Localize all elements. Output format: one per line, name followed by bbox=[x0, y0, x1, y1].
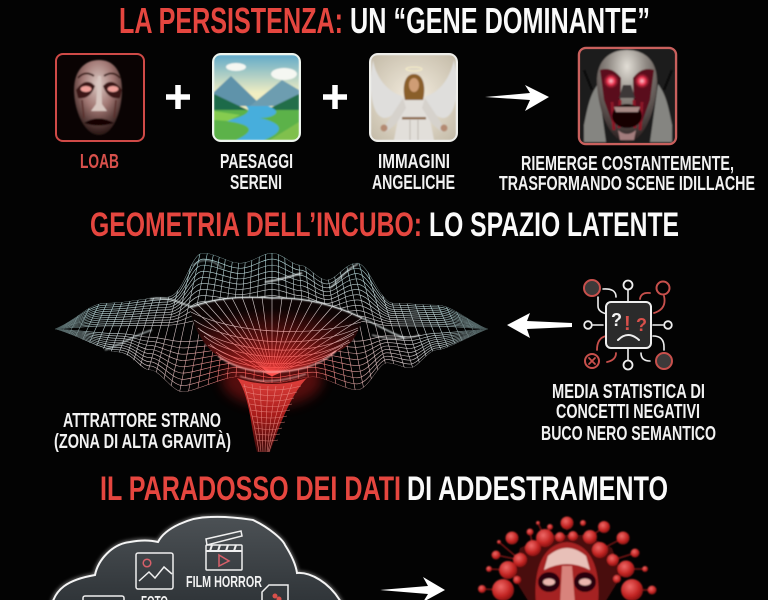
title: geometria dell'incubo: GEOMETRIA DELL’INCUBO: bbox=[90, 206, 422, 244]
title: geometria dell'incubo: LO SPAZIO LATENTE bbox=[429, 206, 679, 244]
panel: serene landscape bbox=[213, 54, 300, 141]
chart: latent space mesh bbox=[55, 253, 488, 452]
panel: loab portrait bbox=[56, 54, 144, 141]
label: riemerge costantemente bbox=[499, 153, 755, 195]
arrow: to red head bbox=[380, 577, 445, 600]
label: immagini angeliche: ANGELICHE bbox=[372, 172, 455, 194]
icon: screen bbox=[83, 596, 124, 600]
illustration: data-bloated red head bbox=[478, 516, 656, 600]
icon: photo bbox=[136, 553, 173, 589]
label: media statistica bbox=[541, 381, 716, 445]
label: paesaggi sereni bbox=[220, 151, 293, 194]
label: attrattore strano bbox=[54, 410, 231, 453]
funnel bbox=[237, 378, 307, 452]
label: film horror: FILM HORROR bbox=[186, 574, 262, 591]
icon: plus bbox=[323, 85, 347, 109]
title: la persistenza: LA PERSISTENZA: bbox=[119, 0, 343, 41]
icon: plus bbox=[166, 85, 190, 109]
label: immagini angeliche: IMMAGINI bbox=[378, 151, 450, 173]
label: attrattore strano: ATTRATTORE STRANO bbox=[63, 410, 221, 432]
title: il paradosso dei dati: DI ADDESTRAMENTO bbox=[407, 470, 668, 508]
label: attrattore strano: (ZONA DI ALTA GRAVITÀ) bbox=[54, 430, 231, 453]
label: paesaggi sereni: PAESAGGI bbox=[220, 151, 293, 173]
title: la persistenza bbox=[119, 0, 650, 41]
icon: clapperboard bbox=[206, 531, 242, 570]
arrow: to monster bbox=[485, 85, 549, 111]
title: la persistenza: UN “GENE DOMINANTE” bbox=[350, 0, 650, 41]
icon: semantic black hole bbox=[584, 280, 672, 370]
label: media statistica: CONCETTI NEGATIVI bbox=[556, 401, 700, 423]
icon: semantic black hole: ! bbox=[624, 313, 631, 335]
label: immagini angeliche bbox=[372, 151, 455, 194]
panel: angelic image bbox=[370, 54, 457, 141]
icon: semantic black hole: ? bbox=[636, 315, 647, 335]
title: il paradosso dei dati: IL PARADOSSO DEI DATI bbox=[100, 470, 401, 508]
label: paesaggi sereni: SERENI bbox=[230, 172, 282, 194]
label: media statistica: MEDIA STATISTICA DI bbox=[552, 381, 705, 403]
ridge highlights bbox=[105, 260, 420, 381]
label: loab: LOAB bbox=[80, 151, 119, 173]
icon: semantic black hole: ? bbox=[611, 310, 622, 330]
arrow: to mesh bbox=[507, 313, 572, 338]
panel: training data cloud bbox=[52, 517, 342, 600]
panel: monster portrait bbox=[579, 48, 676, 144]
icon: document bbox=[262, 585, 288, 600]
